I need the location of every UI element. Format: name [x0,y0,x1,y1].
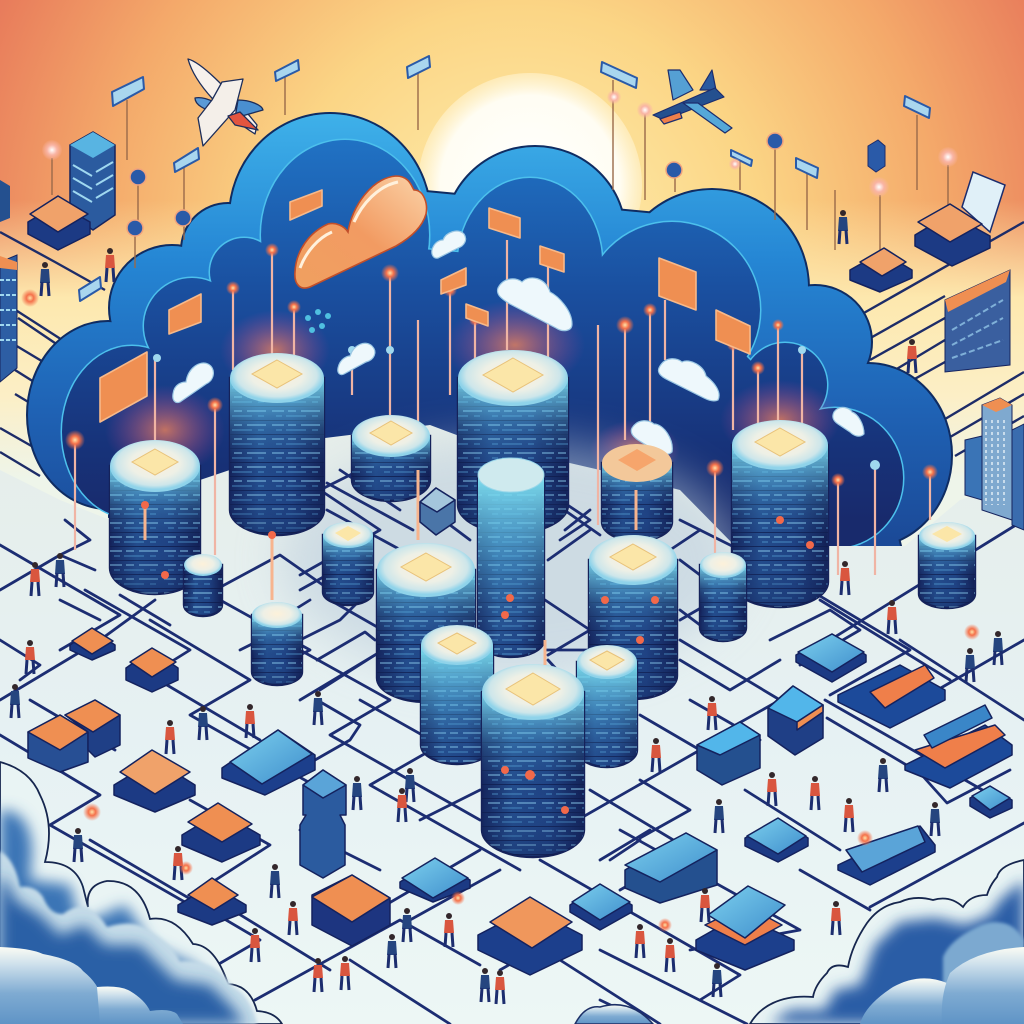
foreground cloud bottom right [750,860,1024,1024]
deep blue middle [0,875,245,1024]
floor sparks [21,289,980,932]
pale middle lobes [0,851,257,1024]
cylinder 4 [458,350,568,533]
stack with orange layer [696,886,794,970]
cylinder 15 [421,625,493,764]
second front lobe [97,986,183,1024]
platform lower left [182,803,260,862]
cloud outline and pale edge [750,860,1024,1024]
cylinder 14 [919,522,975,608]
isometric platforms with blue tops [222,488,1012,970]
cylinder 5 [602,444,672,541]
cylinder 17 [482,664,584,857]
cylinder 8 [323,522,373,605]
cylinder 1 [110,440,200,594]
server tower top left [70,132,115,230]
server cylinders [110,350,975,857]
blue platform A [796,634,866,682]
glowing uplinks in front of servers [141,470,814,814]
orange cards on cloud [100,190,750,422]
boxes left [28,700,120,772]
platform bottom center [478,897,582,975]
container [625,833,717,903]
blue cloud body [770,880,1024,1024]
right stripe lines [855,222,1024,456]
platform top right 2 [850,248,912,292]
cylinder 12 [589,535,677,699]
upper lobe [943,922,1024,1024]
cloud outline and pale edge [0,762,282,1024]
large orange cloud icon [295,176,426,288]
small white clouds [173,231,864,454]
blue cloud body [0,810,250,1024]
cylinder 7 [184,554,222,616]
front lobe right [942,947,1024,1024]
platform top right 1 [915,204,990,266]
blue box B [768,686,823,755]
cylinder 11 [478,458,544,657]
platform bottom left [178,878,246,925]
blue platform B [745,818,808,862]
left edge server panels [0,180,17,382]
platform top left [28,196,90,250]
cylinder 10 [377,543,475,702]
cylinder 9 [252,602,302,685]
blue platform F [222,730,315,795]
cylinder 6 [732,420,828,607]
bottle icon [868,140,885,172]
small box center [420,488,455,535]
warm haze at cloud base [105,300,840,480]
blue box A [697,722,760,785]
orange box [312,875,390,946]
cylinder 3 [352,415,430,501]
floor plane [0,425,1024,1024]
left stripe lines [0,232,105,512]
hanging tags and icons above cloud [42,56,958,301]
front lobe left [860,978,960,1024]
foreground cloud bottom left [0,762,282,1024]
cylinder 13 [700,552,746,641]
platform small B [126,648,178,692]
platform left mid [114,750,195,812]
cylinder 16 [577,645,637,767]
foreground cloud bottom center [575,1005,653,1024]
data posts with glowing nodes on the cloud [65,240,938,575]
airplane right [653,70,732,133]
small tile right [970,786,1012,818]
giant cloud backdrop [28,114,951,548]
blue platform D [570,884,632,930]
blue platform C [838,826,935,885]
right edge buildings [945,270,1024,530]
front white lobe [0,947,103,1024]
orange on blue platform [838,665,945,728]
blue network nodes on cloud [305,309,331,333]
isometric platforms with orange tops [28,196,990,975]
sun glow behind cloud [418,73,642,297]
cloud rim [28,114,951,546]
blue stack right [905,705,1012,788]
airplane left [188,59,263,146]
floor shadow under servers [280,440,740,680]
cylinder 2 [230,353,324,535]
cloud front face [62,140,903,548]
laptop top right [962,172,1005,232]
blue platform E [400,858,470,902]
tall stack [300,770,346,878]
people on floor [10,210,1003,1004]
network wiring on floor [0,470,1024,1024]
platform small A [70,628,115,660]
